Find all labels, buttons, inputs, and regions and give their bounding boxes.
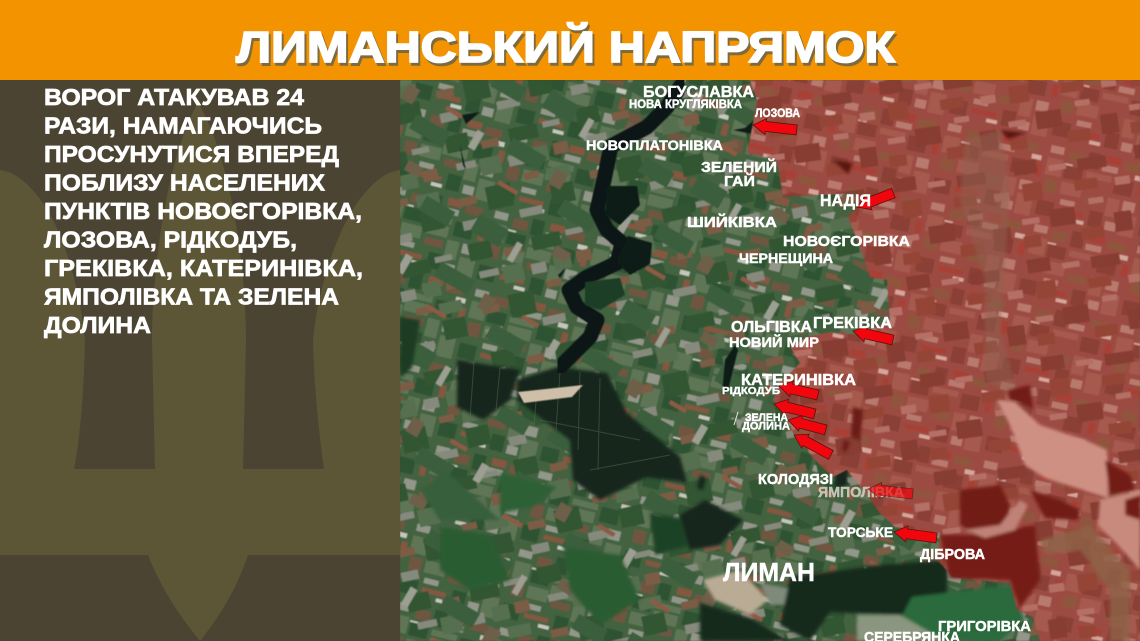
- settlement labels: ЛОЗОВА: [755, 108, 800, 120]
- settlement labels: НАДІЯ: [820, 191, 871, 210]
- panel text: ВОРОГ АТАКУВАВ 24: [44, 84, 304, 110]
- settlement labels: ШИЙКІВКА: [687, 213, 777, 231]
- panel text: ПУНКТІВ НОВОЄГОРІВКА,: [44, 198, 362, 224]
- arrow: Nadiia: [854, 186, 896, 214]
- farmland background: [400, 80, 1140, 641]
- arrow: Yampolivka: [867, 481, 914, 502]
- settlement labels: КАТЕРИНІВКА: [741, 372, 856, 389]
- panel text: ЛОЗОВА, РІДКОДУБ,: [44, 226, 297, 252]
- occupied terrain features: [833, 130, 1140, 641]
- trident emblem: [0, 103, 400, 641]
- panel text: ПОБЛИЗУ НАСЕЛЕНИХ: [44, 170, 326, 196]
- satellite map: [400, 80, 1140, 641]
- settlement labels: ЧЕРНЕЩИНА: [739, 251, 833, 266]
- panel text: ГРЕКІВКА, КАТЕРИНІВКА,: [44, 255, 363, 281]
- settlement labels: НОВОПЛАТОНІВКА: [586, 138, 723, 153]
- panel text: ДОЛИНА: [44, 312, 151, 338]
- settlement labels: ДОЛИНА: [742, 420, 790, 432]
- settlement labels: ЗЕЛЕНИЙ: [701, 158, 777, 176]
- arrow: Torske: [893, 524, 938, 546]
- settlement labels: ЛИМАН: [723, 557, 815, 587]
- left panel: [0, 80, 400, 641]
- settlement labels: ГРЕКІВКА: [813, 315, 892, 332]
- arrow: Ridkodub: [772, 396, 817, 422]
- arrow: Zelena Dolyna south: [790, 428, 835, 462]
- settlement labels: НОВИЙ МИР: [729, 333, 819, 350]
- panel text: ЯМПОЛІВКА ТА ЗЕЛЕНА: [44, 284, 339, 310]
- settlement labels: ГРИГОРІВКА: [938, 619, 1032, 635]
- header bar: [0, 0, 1140, 80]
- arrow: Katerynivka: [777, 378, 820, 403]
- arrow: Hrekivka: [851, 323, 895, 348]
- panel text: [44, 84, 363, 338]
- settlement labels: НОВОЄГОРІВКА: [783, 234, 911, 250]
- sand strip: [518, 385, 583, 403]
- settlement labels: БОГУСЛАВКА: [643, 84, 754, 101]
- settlement labels: ДІБРОВА: [920, 547, 986, 563]
- settlement labels: [586, 84, 1032, 641]
- title: ЛИМАНСЬКИЙ НАПРЯМОК: [236, 21, 895, 72]
- river lobes: [460, 112, 770, 395]
- panel text: ПРОСУНУТИСЯ ВПЕРЕД: [44, 141, 339, 167]
- river: [560, 84, 682, 367]
- settlement labels: КОЛОДЯЗІ: [758, 472, 833, 488]
- forest clearings: [470, 362, 670, 470]
- arrow: Lozova: [752, 117, 798, 138]
- settlement labels: ЗЕЛЕНА: [745, 412, 788, 424]
- arrow: Zelena Dolyna: [786, 412, 828, 438]
- label: Yampolivka (under arrow): ЯМПОЛІВКА: [818, 485, 905, 501]
- settlement labels: ГАЙ: [724, 172, 755, 190]
- settlement labels: НОВА КРУГЛЯКІВКА: [629, 99, 742, 111]
- attack arrows: [752, 117, 938, 546]
- panel text: РАЗИ, НАМАГАЮЧИСЬ: [44, 112, 322, 138]
- occupied territory: [747, 80, 1140, 641]
- settlement labels: ТОРСЬКЕ: [828, 524, 893, 540]
- settlement labels: ОЛЬГІВКА: [731, 319, 812, 336]
- settlement labels: РІДКОДУБ: [722, 385, 780, 397]
- forests and terrain: [400, 317, 1024, 641]
